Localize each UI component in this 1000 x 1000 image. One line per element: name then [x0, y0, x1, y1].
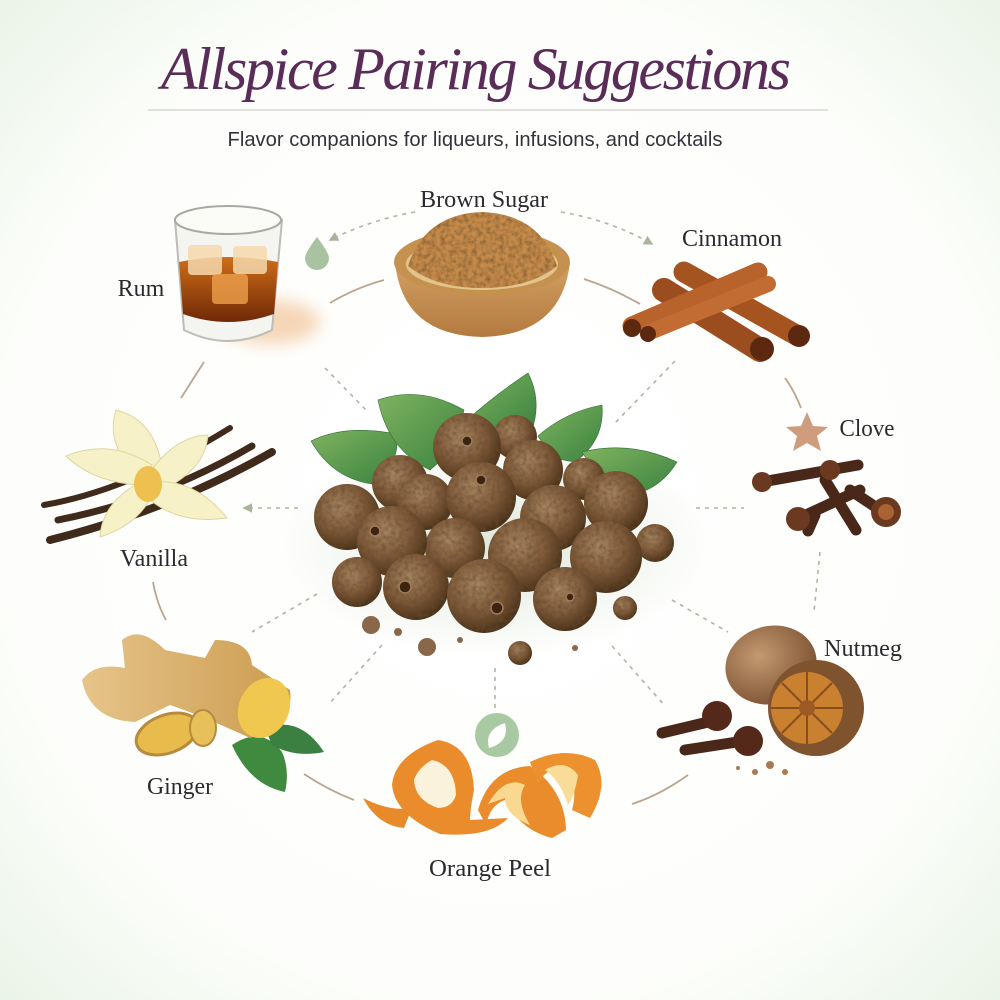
- item: brown sugar: Brown Sugar: [420, 187, 548, 213]
- item: ginger: Ginger: [147, 774, 213, 800]
- leaves: [311, 373, 677, 495]
- center: allspice: [280, 373, 710, 665]
- icon: water drop: [305, 237, 329, 270]
- item: nutmeg: Nutmeg: [824, 636, 902, 662]
- item: ginger: [82, 634, 324, 800]
- item: cinnamon: [623, 226, 810, 361]
- item: brown sugar: [394, 187, 570, 337]
- crumbs: [362, 616, 578, 656]
- title: Allspice Pairing Suggestions: [157, 36, 791, 102]
- outer ring arrows: [153, 279, 801, 804]
- subtitle: Flavor companions for liqueurs, infusions, and cocktails: [228, 129, 722, 151]
- icon: leaf badge: [475, 713, 519, 757]
- item: rum: [118, 206, 320, 344]
- item: nutmeg: [662, 615, 902, 775]
- item: clove: [752, 416, 901, 531]
- connecting arrows: [244, 212, 820, 712]
- item: clove: Clove: [840, 416, 894, 442]
- icon: star: [786, 412, 828, 451]
- berries: [314, 413, 674, 665]
- berry eyes: [370, 436, 574, 614]
- item: cinnamon: Cinnamon: [682, 226, 782, 252]
- item: vanilla: [44, 410, 272, 572]
- item: rum: Rum: [118, 276, 165, 302]
- item: orange peel: Orange Peel: [429, 856, 551, 882]
- item: orange peel: [363, 740, 601, 882]
- item: vanilla: Vanilla: [120, 546, 188, 572]
